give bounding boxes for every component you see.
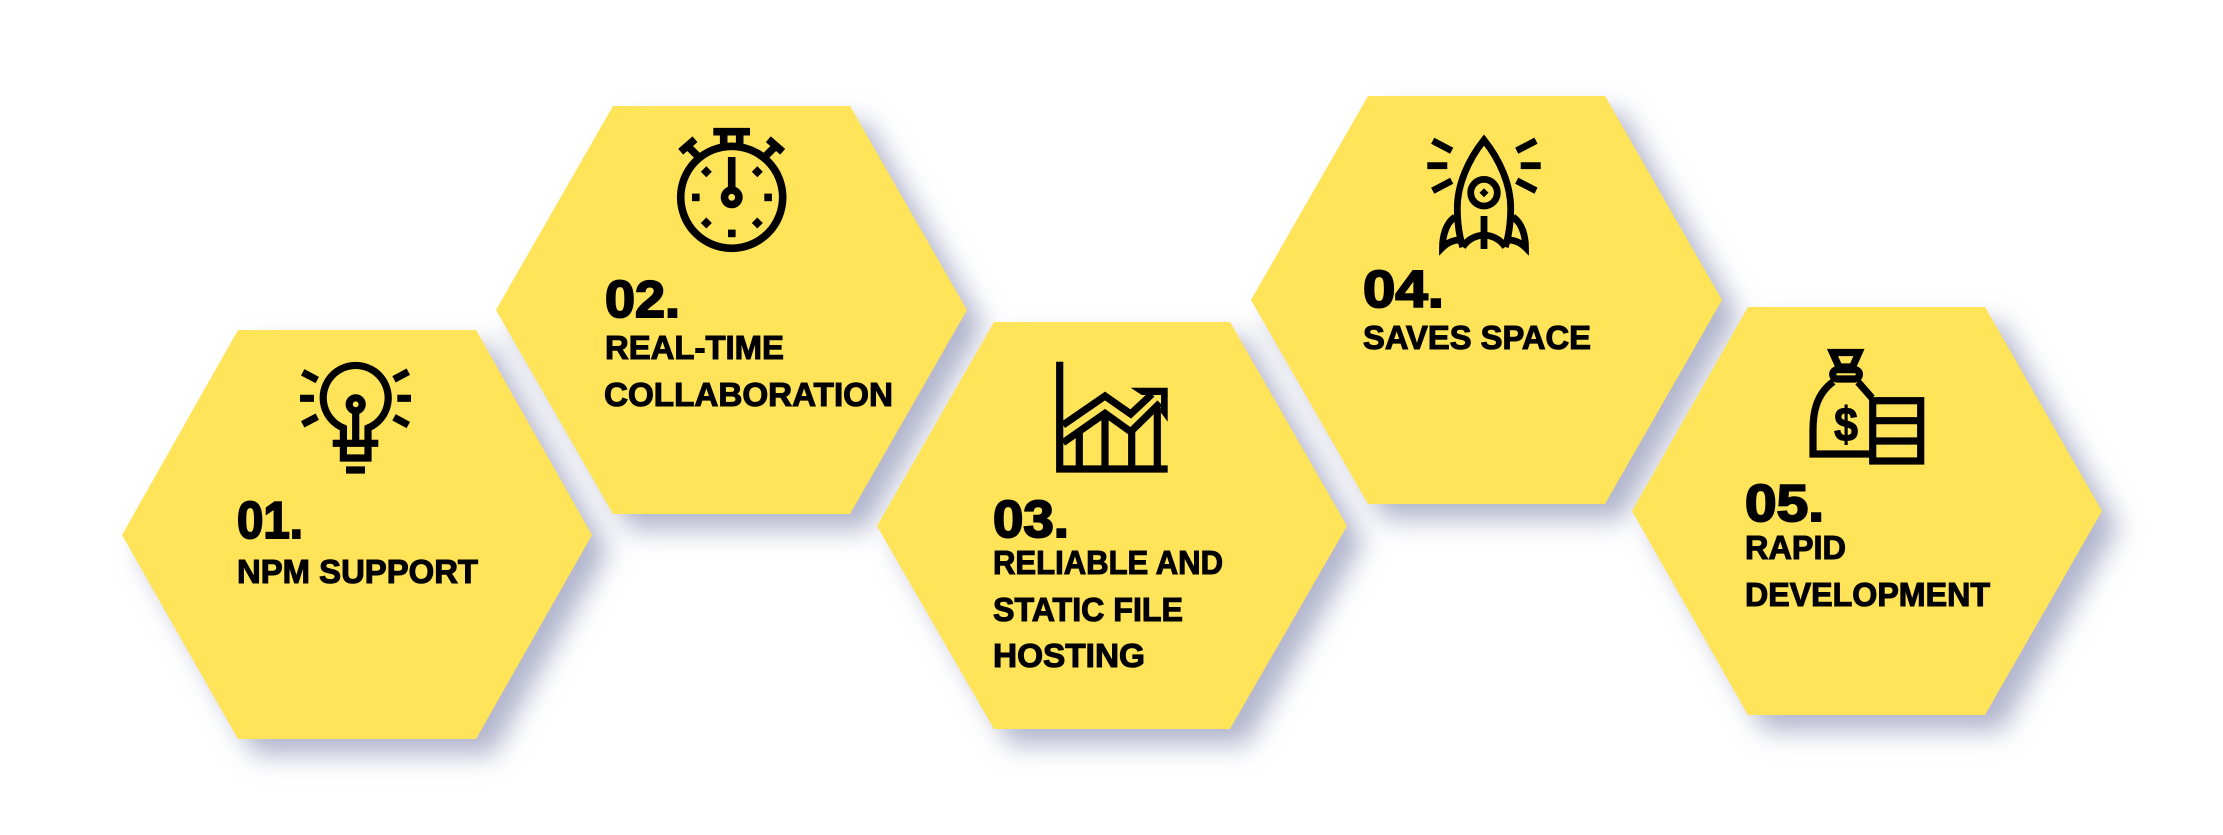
label: rapid development: DEVELOPMENT (1745, 576, 1990, 613)
label: reliable and static file hosting: HOSTING (993, 637, 1145, 674)
label: real-time collaboration: COLLABORATION (604, 376, 893, 413)
panel: 03 reliable and static file hosting (877, 322, 1347, 729)
icon: money bag and coins (1813, 352, 1921, 461)
number 05: 05. (1745, 475, 1824, 533)
panel: 01 NPM support (122, 330, 592, 739)
icon: light bulb (300, 365, 411, 470)
label: rapid development: RAPID (1745, 529, 1846, 566)
label: real-time collaboration (604, 329, 893, 413)
number 04: 04. (1363, 261, 1444, 319)
hexagon 04 (1251, 96, 1722, 504)
label: reliable and static file hosting: RELIABLE AND (993, 544, 1223, 581)
label: rapid development (1745, 529, 1990, 613)
label: reliable and static file hosting (993, 544, 1223, 674)
number 01: 01. (237, 492, 303, 550)
icon: rocket (1427, 140, 1541, 249)
number 02: 02. (605, 271, 680, 329)
icon: growth chart (1060, 362, 1168, 469)
hexagon 01 (122, 330, 592, 739)
number 03: 03. (993, 491, 1069, 549)
panel: 05 rapid development (1632, 307, 2102, 715)
label: NPM support: NPM SUPPORT (237, 553, 478, 590)
label: saves space: SAVES SPACE (1363, 319, 1591, 356)
hexagon 05 (1632, 307, 2102, 715)
panel: 04 saves space (1251, 96, 1722, 504)
hexagon 03 (877, 322, 1347, 729)
label: real-time collaboration: REAL-TIME (605, 329, 784, 366)
icon: money bag and coins: $ (1834, 399, 1858, 452)
panel: 02 real-time collaboration (496, 106, 967, 514)
icon: stopwatch (681, 132, 783, 248)
hexagon 02 (496, 106, 967, 514)
label: reliable and static file hosting: STATIC FILE (993, 591, 1183, 628)
